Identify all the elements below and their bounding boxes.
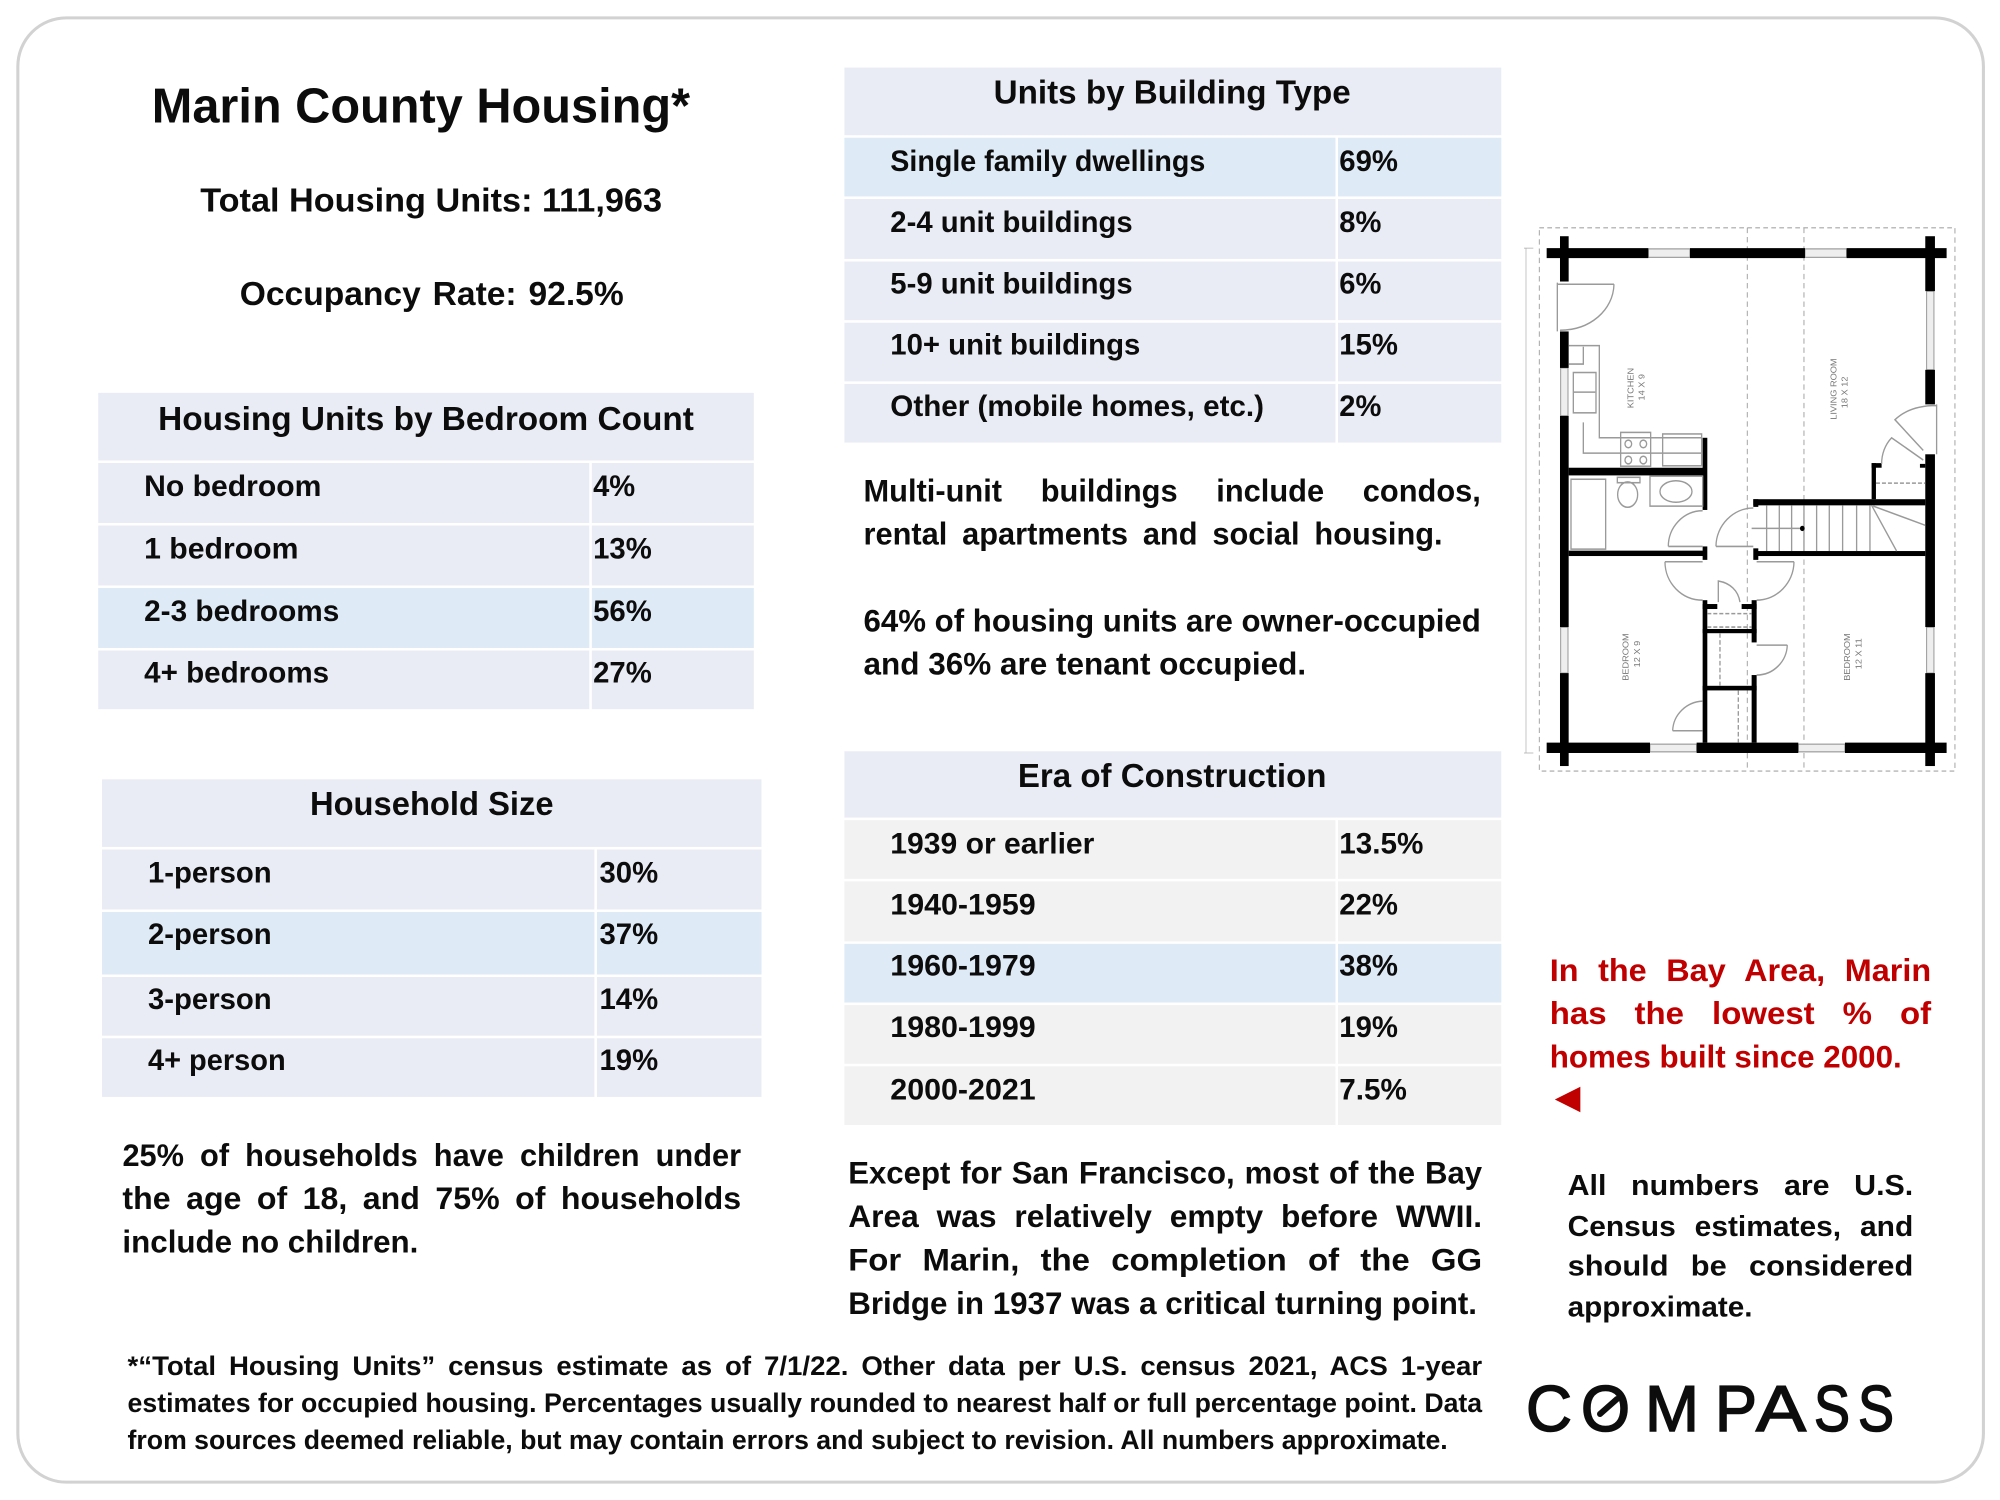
row: 3-person [148,983,658,1016]
doors [1557,283,1937,731]
callout: lowest share of new homes: In the Bay Area, Marin [1550,953,1931,988]
text: census note: approximate. [1568,1291,1753,1323]
table heading: Housing Units by Bedroom Count [158,401,694,438]
row: single family [890,145,1398,178]
row: 2-3 bedrooms: 2-3 bedrooms [144,595,339,628]
dashed outline [1524,228,1955,771]
row: 1-person: 30% [599,857,658,890]
room labels: 12 X 11 [1854,638,1863,669]
floor plan [1524,228,1955,771]
row: 10+ unit: 10+ unit buildings [890,329,1140,362]
logo: compass: S [1858,1372,1894,1445]
table heading: Units by Building Type [994,74,1351,111]
row: 1-person [148,857,658,890]
text: multi-unit buildings: rental apartments and social housing. [864,517,1443,552]
text: bay area before WWII: Bridge in 1937 was a critical turning point. [848,1286,1477,1321]
logo: compass: O [1581,1372,1630,1445]
callout: lowest share of new homes: homes built since 2000. [1550,1040,1902,1075]
row: 4+ bedrooms [144,656,652,689]
text: owner occupancy: 64% of housing units are owner-occupied [864,603,1481,638]
logo: compass: A [1756,1372,1807,1445]
row: other: Other (mobile homes, etc.) [890,390,1264,423]
panel: household size [102,779,761,1097]
callout: lowest share of new homes: has the lowest % of [1550,996,1932,1031]
row: 1939 or earlier: 13.5% [1339,827,1423,860]
room labels: 18 X 12 [1840,376,1849,408]
row: no bedroom: No bedroom [144,470,321,503]
room labels: LIVING ROOM [1829,358,1838,420]
panel: units by building type [844,68,1501,443]
room labels: 12 X 9 [1633,641,1642,667]
row: 2-person: 37% [599,918,658,951]
room labels: 14 X 9 [1637,374,1646,401]
footnote: estimates for occupied housing. Percentages usually rounded to nearest half or full percentage point. Data [128,1388,1483,1418]
row: 5-9 unit [890,267,1381,300]
row: 10+ unit: 15% [1339,329,1398,362]
row: 10+ unit [890,329,1398,362]
footnote: *“Total Housing Units” census estimate as of 7/1/22. Other data per U.S. census 2021, ACS 1-year [128,1351,1483,1381]
row: 1-person: 1-person [148,857,272,890]
row: 1960-1979: 38% [1339,950,1398,983]
row: 3-person: 14% [599,983,658,1016]
row: 2-person: 2-person [148,918,272,951]
row: 1940-1959 [890,889,1398,922]
row: no bedroom [144,470,635,503]
row: 4+ person [148,1044,658,1077]
text: census note: All numbers are U.S. [1568,1170,1913,1202]
row: 1940-1959: 1940-1959 [890,889,1036,922]
row: 2-person [148,918,658,951]
text: bay area before WWII [848,1156,1483,1321]
panel: housing units by bedroom count [98,393,754,709]
text: households with children: include no children. [122,1225,418,1260]
row: 1 bedroom: 1 bedroom [144,533,298,566]
row: single family: Single family dwellings [890,145,1205,178]
room labels: BEDROOM [1843,633,1852,681]
row: 2-3 bedrooms: 56% [593,595,652,628]
row: 1940-1959: 22% [1339,889,1398,922]
walls [1547,236,1947,766]
table heading: Era of Construction [1018,758,1327,795]
text: bay area before WWII: Area was relatively empty before WWII. [848,1199,1482,1234]
row: single family: 69% [1339,145,1398,178]
text: census note: Census estimates, and [1568,1211,1913,1243]
panel: era of construction [844,751,1501,1125]
row: 1939 or earlier [890,827,1423,860]
row: 1960-1979 [890,950,1398,983]
text: households with children: the age of 18, and 75% of households [122,1181,741,1216]
title: Marin County Housing* [152,79,691,133]
callout: lowest share of new homes [1550,953,1932,1112]
row: 5-9 unit: 6% [1339,267,1381,300]
text: bay area before WWII: Except for San Francisco, most of the Bay [848,1156,1483,1191]
footnote [128,1351,1483,1455]
logo: compass: C [1526,1372,1572,1445]
row: 1980-1999: 19% [1339,1011,1398,1044]
text: multi-unit buildings: Multi-unit buildings include condos, [864,473,1481,508]
text: bay area before WWII: For Marin, the completion of the GG [848,1242,1482,1277]
logo: compass: M [1645,1372,1699,1445]
logo: compass [1526,1372,1894,1445]
row: 2-3 bedrooms [144,595,652,628]
row: 2000-2021: 2000-2021 [890,1073,1036,1106]
stairs [1752,505,1925,551]
room labels [1621,358,1863,681]
text: census note: should be considered [1568,1251,1913,1283]
text: census note [1568,1170,1913,1323]
row: 2000-2021: 7.5% [1339,1073,1407,1106]
occupancy rate: Occupancy Rate: 92.5% [240,276,624,313]
room labels: BEDROOM [1621,633,1630,681]
room labels: KITCHEN [1626,368,1635,408]
footnote: from sources deemed reliable, but may contain errors and subject to revision. All numbers approximate. [128,1425,1448,1455]
windows [1561,249,1934,752]
row: 4+ bedrooms: 27% [593,656,652,689]
table heading: Household Size [310,786,554,823]
row: 4+ person: 4+ person [148,1044,286,1077]
row: 1939 or earlier: 1939 or earlier [890,827,1094,860]
text: owner occupancy: and 36% are tenant occupied. [864,647,1306,682]
row: no bedroom: 4% [593,470,635,503]
row: 5-9 unit: 5-9 unit buildings [890,267,1133,300]
row: 2-4 unit: 8% [1339,206,1381,239]
text: households with children [122,1138,741,1260]
text: households with children: 25% of households have children under [122,1138,741,1173]
row: 2-4 unit [890,206,1381,239]
row: 4+ person: 19% [599,1044,658,1077]
logo: compass: P [1715,1372,1757,1445]
text: owner occupancy [864,603,1481,682]
text: multi-unit buildings [864,473,1481,552]
row: other: 2% [1339,390,1381,423]
row: 1 bedroom: 13% [593,533,652,566]
arrow: red triangle [1555,1087,1580,1112]
total housing units: Total Housing Units: 111,963 [200,183,662,220]
row: 1980-1999 [890,1011,1398,1044]
row: 2000-2021 [890,1073,1407,1106]
row: 1960-1979: 1960-1979 [890,950,1036,983]
row: 4+ bedrooms: 4+ bedrooms [144,656,329,689]
row: 2-4 unit: 2-4 unit buildings [890,206,1133,239]
row: 3-person: 3-person [148,983,272,1016]
row: 1 bedroom [144,533,652,566]
logo: compass: S [1814,1372,1850,1445]
row: 1980-1999: 1980-1999 [890,1011,1036,1044]
kitchen and bath fixtures [1569,346,1925,743]
